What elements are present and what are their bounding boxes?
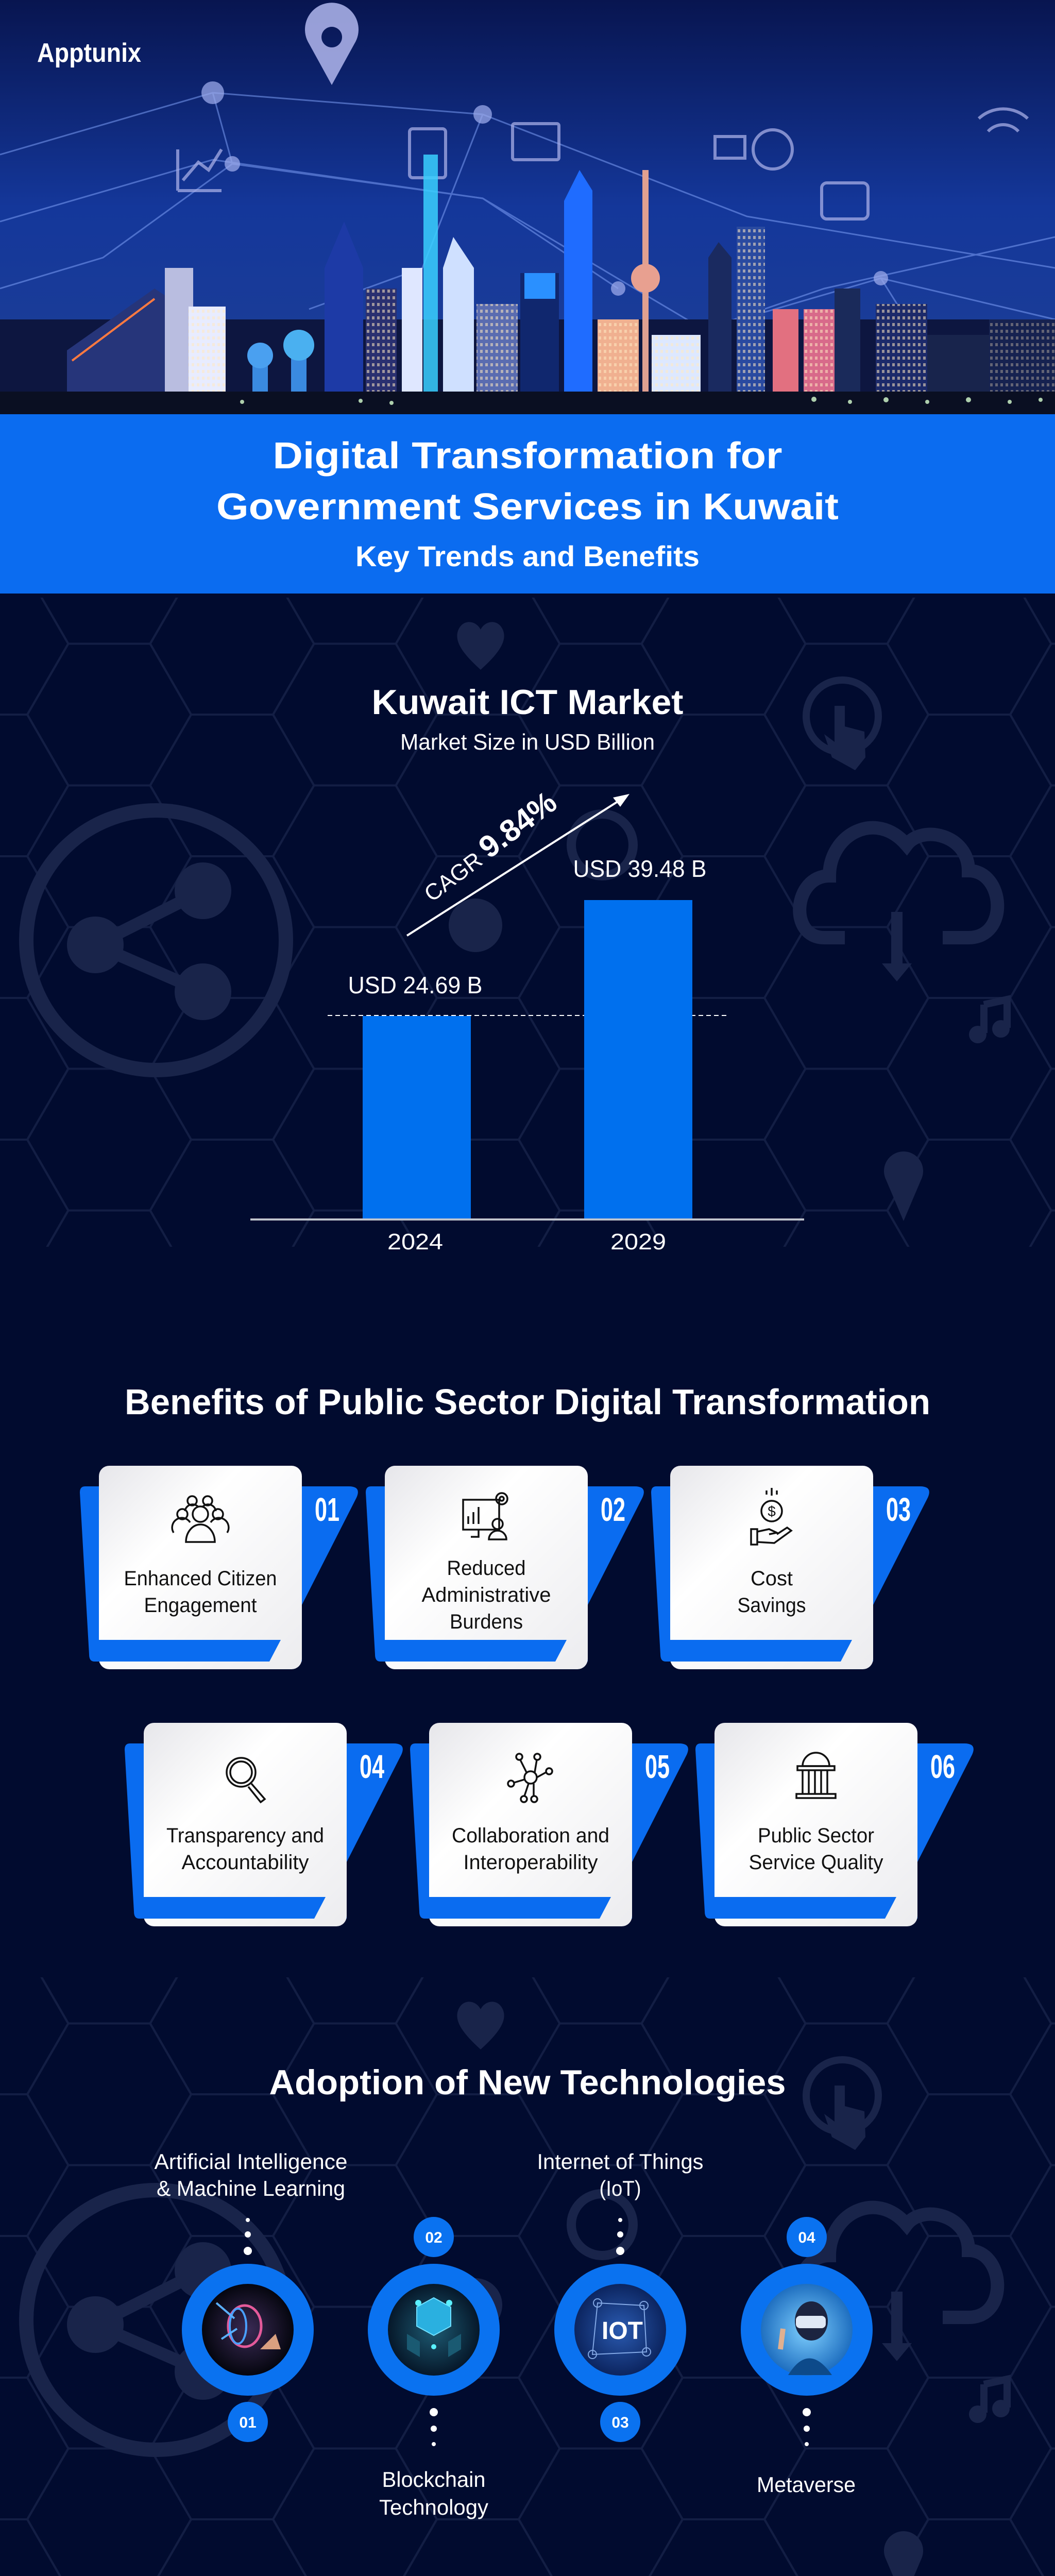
icon: network nodes (508, 1754, 552, 1802)
title banner (0, 414, 1055, 594)
icon: magnifier (227, 1758, 265, 1802)
bar 2029 (584, 900, 692, 1219)
panel: benefit 02 Reduced Administrative Burdens: 02 (601, 1491, 625, 1528)
panel: benefit 03 Cost Savings: Cost (751, 1567, 793, 1590)
panel: benefit 06 Public Sector Service Quality: 06 (930, 1748, 955, 1785)
tech 04: Metaverse: Metaverse (757, 2472, 856, 2497)
tech 01: AI & ML: Artificial Intelligence (155, 2149, 347, 2174)
icon: hand with coin: $ (768, 1503, 776, 1519)
tech 03: IoT: 03 (611, 2414, 629, 2431)
chart: bar chart (250, 855, 804, 1255)
icon: monitor with chart (463, 1493, 507, 1539)
value 2024: USD 24.69 B (348, 972, 482, 998)
panel: benefit 02 Reduced Administrative Burdens (366, 1466, 644, 1669)
panel: benefit 04 Transparency and Accountability (125, 1723, 403, 1926)
tech 04: Metaverse: 04 (798, 2229, 815, 2246)
subtitle: Key Trends and Benefits (355, 540, 700, 572)
icon: hand with coin (751, 1488, 791, 1545)
panel: benefit 01 Enhanced Citizen Engagement: Enhanced Citizen (124, 1567, 277, 1590)
heading: Adoption of New Technologies (269, 2063, 786, 2102)
section: Benefits heading: Benefits of Public Sector Digital Transformation (125, 1382, 930, 1422)
icon: location pin (305, 3, 359, 85)
title line 1: Digital Transformation for (273, 435, 782, 477)
tech 01: AI & ML (155, 2149, 347, 2442)
tech 02: Blockchain: 02 (425, 2229, 443, 2246)
icon: people group (172, 1496, 229, 1542)
panel: benefit 03 Cost Savings (651, 1466, 929, 1669)
panel: benefit 02 Reduced Administrative Burdens: Burdens (450, 1611, 523, 1633)
tech 02: Blockchain: Technology (379, 2495, 488, 2519)
panel: benefit 05 Collaboration and Interoperability: Interoperability (464, 1851, 598, 1874)
value 2029: USD 39.48 B (573, 855, 707, 882)
header photo: Kuwait skyline with network (0, 0, 1055, 414)
panel: benefit 05 Collaboration and Interoperability: Collaboration and (452, 1824, 609, 1847)
panel: benefit 03 Cost Savings: 03 (886, 1491, 911, 1528)
bar 2024 (363, 1016, 471, 1219)
panel: benefit 06 Public Sector Service Quality: Public Sector (758, 1824, 874, 1847)
panel: benefit 05 Collaboration and Interoperability (410, 1723, 688, 1926)
panel: benefit 01 Enhanced Citizen Engagement: 01 (315, 1491, 339, 1528)
tech 03: IoT (537, 2149, 704, 2442)
panel: benefit 01 Enhanced Citizen Engagement: Engagement (144, 1594, 257, 1617)
tech 04: Metaverse (741, 2217, 873, 2497)
tech 03: IoT: Internet of Things (537, 2149, 704, 2174)
skyline (0, 155, 1055, 414)
arrow: CAGR growth (407, 785, 629, 936)
tech 03: IoT: (IoT) (600, 2176, 641, 2200)
tech 02: Blockchain: Blockchain (382, 2467, 485, 2492)
tech 01: AI & ML: & Machine Learning (157, 2176, 345, 2200)
panel: benefit 04 Transparency and Accountability: 04 (360, 1748, 384, 1785)
title line 2: Government Services in Kuwait (216, 486, 839, 528)
panel: benefit 03 Cost Savings: Savings (738, 1594, 806, 1617)
panel: benefit 04 Transparency and Accountability: Transparency and (166, 1824, 324, 1847)
panel: benefit 01 Enhanced Citizen Engagement (80, 1466, 358, 1669)
panel: benefit 02 Reduced Administrative Burdens: Reduced (447, 1557, 525, 1580)
panel: benefit 06 Public Sector Service Quality: Service Quality (749, 1851, 883, 1874)
subheading: Market Size in USD Billion (400, 730, 655, 755)
icon: government building (796, 1753, 836, 1798)
year labels: 2024 (387, 1229, 443, 1255)
tech 02: Blockchain (368, 2217, 500, 2519)
panel: benefit 05 Collaboration and Interoperability: 05 (645, 1748, 670, 1785)
tech 03: IoT: IOT (602, 2317, 643, 2345)
panel: benefit 04 Transparency and Accountability: Accountability (181, 1851, 309, 1874)
chart: bar chart: 2029 (610, 1229, 666, 1255)
section: Kuwait ICT Market (250, 683, 804, 1255)
panel: benefit 02 Reduced Administrative Burdens: Administrative (421, 1584, 551, 1606)
heading: Kuwait ICT Market (372, 683, 683, 722)
panel: benefit 06 Public Sector Service Quality (695, 1723, 974, 1926)
tech 01: AI & ML: 01 (239, 2414, 257, 2431)
section: Adoption of New Technologies (155, 2063, 873, 2519)
logo: Apptunix: Apptunix (37, 38, 141, 68)
arrow: CAGR growth: CAGR 9.84% (415, 785, 563, 908)
